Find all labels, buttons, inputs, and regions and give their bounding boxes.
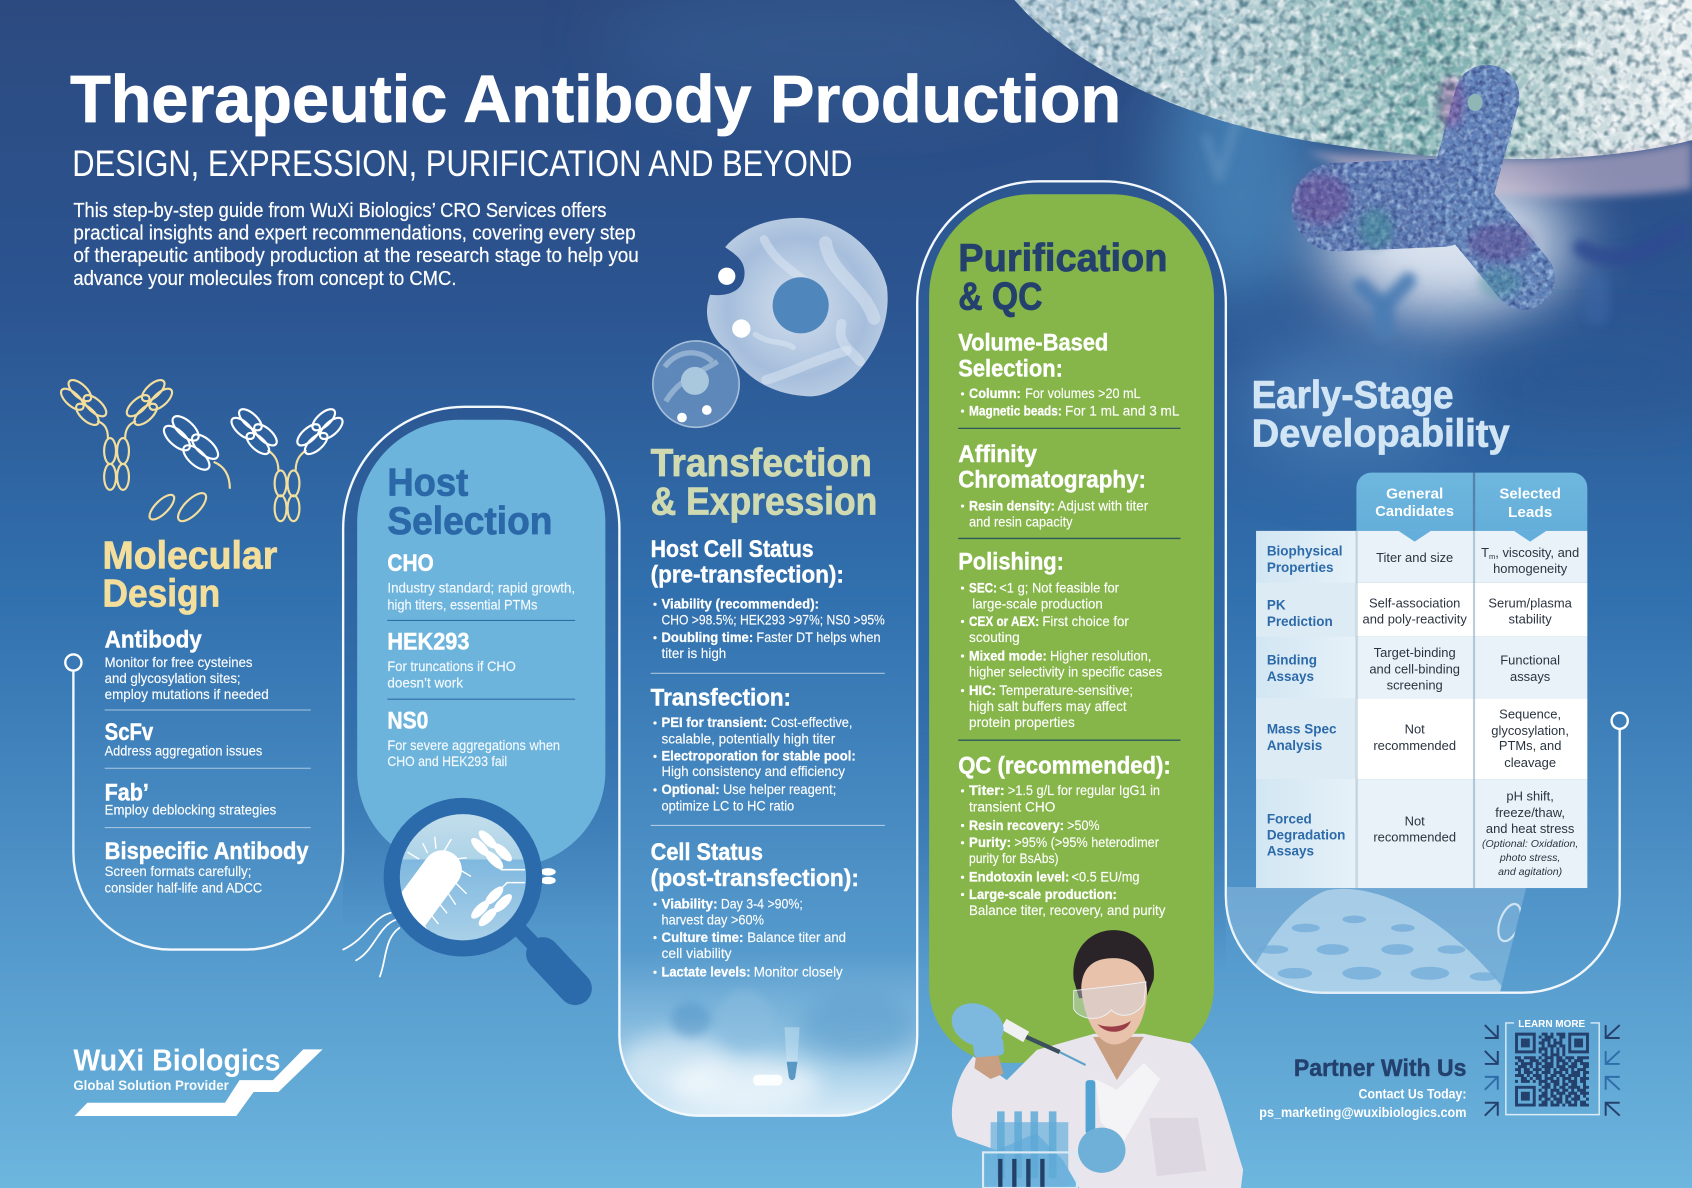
section: volume-based selection: For 1 mL and 3 mL xyxy=(1065,402,1180,418)
logo: WuXi Biologics xyxy=(73,1044,323,1116)
intro paragraph: of therapeutic antibody production at the research stage to help you xyxy=(73,244,639,267)
pipette xyxy=(1004,1024,1086,1065)
item: cho: high titers, essential PTMs xyxy=(387,597,537,613)
test tube xyxy=(1086,1080,1095,1134)
section: QC recommended: Resin recovery: xyxy=(969,817,1064,833)
photo: hand with tube in transfection panel xyxy=(620,989,917,1111)
heading: transfection and expression xyxy=(651,442,877,524)
section: affinity chromatography: Resin density: xyxy=(969,497,1055,513)
panel: host selection xyxy=(357,420,605,866)
table rows xyxy=(1256,473,1587,888)
section: polishing: <1 g; Not feasible for xyxy=(999,579,1119,595)
item: bispecific antibody xyxy=(105,839,309,895)
section: cell status: Viability: xyxy=(661,896,718,912)
smile xyxy=(1097,1021,1131,1032)
section: volume-based selection xyxy=(958,331,1180,418)
illustration: blurred background antibodies xyxy=(1206,124,1678,329)
section: QC recommended: Large-scale production: xyxy=(969,886,1117,902)
face xyxy=(1081,958,1147,1044)
column: selected leads: photo stress, xyxy=(1499,852,1560,864)
heading: early-stage developability xyxy=(1252,374,1510,456)
heading: early-stage developability: Early-Stage xyxy=(1252,374,1454,417)
upper glove xyxy=(945,995,1011,1058)
section: polishing xyxy=(958,550,1162,730)
item: hek293: HEK293 xyxy=(387,630,469,656)
section: QC recommended: >95% (>95% heterodimer xyxy=(1014,834,1159,850)
section: polishing: CEX or AEX: xyxy=(969,613,1039,629)
item: bispecific antibody: Bispecific Antibody xyxy=(105,839,309,865)
item: cho: Industry standard; rapid growth, xyxy=(387,579,575,595)
section: cell status: Balance titer and xyxy=(747,929,846,945)
item: bispecific antibody: consider half-life and ADCC xyxy=(105,879,262,895)
item: cho: CHO xyxy=(387,551,434,577)
QR code with learn more frame xyxy=(1506,1019,1599,1115)
column: selected leads: cleavage xyxy=(1504,755,1556,770)
subtitle: DESIGN, EXPRESSION, PURIFICATION AND BEYOND xyxy=(72,143,852,184)
column: general candidates: Not xyxy=(1405,722,1425,737)
forearm skin xyxy=(974,1052,1004,1079)
item: bispecific antibody: Screen formats carefully; xyxy=(105,863,251,879)
section: cell status: (post-transfection): xyxy=(651,866,859,892)
section: host cell status: CHO >98.5%; HEK293 >97%; NS0 >95% xyxy=(661,612,885,628)
section: polishing: Polishing: xyxy=(958,550,1064,576)
row labels: Assays xyxy=(1267,844,1314,859)
section: cell status xyxy=(651,840,859,980)
item: scfv: ScFv xyxy=(105,720,154,746)
row labels: Properties xyxy=(1267,560,1333,575)
item: fab: Fab’ xyxy=(105,781,149,807)
column: general candidates: screening xyxy=(1387,677,1443,692)
section: QC recommended: >1.5 g/L for regular IgG1 in xyxy=(1008,782,1160,798)
lower glove xyxy=(1078,1128,1125,1173)
flow outline connecting all sections xyxy=(65,181,1628,1116)
column: general candidates: Target-binding xyxy=(1374,645,1456,660)
table header: Leads xyxy=(1508,504,1552,521)
neck xyxy=(1093,1037,1144,1080)
section: QC recommended: transient CHO xyxy=(969,798,1055,814)
heading: host selection: Host xyxy=(387,461,468,504)
section: volume-based selection: Selection: xyxy=(958,357,1063,383)
item: antibody: Monitor for free cysteines xyxy=(105,654,253,670)
column: selected leads: freeze/thaw, xyxy=(1495,805,1565,820)
section: polishing: Mixed mode: xyxy=(969,647,1047,663)
row labels: Analysis xyxy=(1267,738,1322,753)
column: general candidates: Titer and size xyxy=(1376,550,1453,565)
coat collar xyxy=(1095,1063,1160,1144)
item: antibody: Antibody xyxy=(105,627,203,653)
heading: molecular design: Molecular xyxy=(103,535,277,578)
heading: purification and QC: Purification xyxy=(958,237,1168,280)
logo: WuXi Biologics: Global Solution Provider xyxy=(73,1077,229,1093)
icon: magnifier with bacterium and antibodies xyxy=(343,806,575,988)
item: ns0: NS0 xyxy=(387,708,428,734)
column: selected leads: stability xyxy=(1509,612,1552,627)
heading: transfection and expression: & Expression xyxy=(651,481,877,524)
column: selected leads: Serum/plasma xyxy=(1488,595,1573,610)
panel: purification and QC xyxy=(929,194,1214,1063)
column: selected leads: and agitation) xyxy=(1498,866,1562,878)
heading: transfection and expression: Transfection xyxy=(651,442,872,485)
column: selected leads: pH shift, xyxy=(1506,789,1554,804)
section: transfection: scalable, potentially high titer xyxy=(661,730,836,746)
section: cell status: Culture time: xyxy=(661,929,743,945)
section: host cell status: titer is high xyxy=(661,645,726,661)
column: selected leads xyxy=(1481,545,1579,878)
call to action: partner with us: Partner With Us xyxy=(1294,1056,1466,1082)
section: transfection: Optional: xyxy=(661,781,720,797)
item: hek293: doesn’t work xyxy=(387,674,464,690)
illustration: cells xyxy=(653,218,888,427)
item: ns0: For severe aggregations when xyxy=(387,737,560,753)
section: transfection: optimize LC to HC ratio xyxy=(661,797,794,813)
row labels: Binding xyxy=(1267,653,1317,668)
section: cell status: Cell Status xyxy=(651,840,763,866)
illustration: large antibody molecule xyxy=(1294,77,1532,298)
row labels: PK xyxy=(1267,598,1286,613)
column: selected leads: Sequence, xyxy=(1499,707,1561,722)
column: selected leads: PTMs, and xyxy=(1499,738,1561,753)
column: general candidates: and poly-reactivity xyxy=(1363,612,1467,627)
section: transfection xyxy=(651,686,856,813)
column: selected leads: glycosylation, xyxy=(1491,723,1569,738)
column: general candidates xyxy=(1363,550,1467,845)
section: transfection: Electroporation for stable pool: xyxy=(661,748,856,764)
section: polishing: higher selectivity in specific cases xyxy=(969,664,1162,680)
table header xyxy=(1356,473,1587,531)
panel: molecular design xyxy=(103,535,311,895)
section: affinity chromatography xyxy=(958,442,1148,530)
section: host cell status: (pre-transfection): xyxy=(651,563,844,589)
heading: purification and QC: & QC xyxy=(958,276,1042,319)
section: host cell status: Viability (recommended): xyxy=(661,596,819,612)
section: affinity chromatography: Affinity xyxy=(958,442,1038,468)
section: volume-based selection: Volume-Based xyxy=(958,331,1108,357)
item: scfv: Address aggregation issues xyxy=(105,742,262,758)
item: hek293: For truncations if CHO xyxy=(387,658,516,674)
panel: early-stage developability xyxy=(1226,374,1587,998)
section: affinity chromatography: Adjust with titer xyxy=(1058,497,1148,513)
QR code with learn more frame: LEARN MORE xyxy=(1518,1019,1585,1030)
section: QC recommended: QC (recommended): xyxy=(958,754,1171,780)
section: cell status: Monitor closely xyxy=(754,964,843,980)
section: polishing: high salt buffers may affect xyxy=(969,698,1127,714)
item: antibody: and glycosylation sites; xyxy=(105,670,241,686)
intro paragraph: This step-by-step guide from WuXi Biologics’ CRO Services offers xyxy=(73,199,606,222)
section: cell status: Day 3-4 >90%; xyxy=(721,896,803,912)
section: transfection: Cost-effective, xyxy=(771,714,852,730)
intro paragraph: advance your molecules from concept to CMC. xyxy=(73,267,456,290)
section: affinity chromatography: Chromatography: xyxy=(958,468,1146,494)
item: ns0: CHO and HEK293 fail xyxy=(387,753,507,769)
row labels: Biophysical xyxy=(1267,544,1342,559)
well plate photo xyxy=(1226,887,1527,998)
panel backgrounds xyxy=(343,181,1226,1116)
section: polishing: HIC: xyxy=(969,682,996,698)
column: general candidates: recommended xyxy=(1373,738,1456,753)
section: volume-based selection: For volumes >20 mL xyxy=(1025,385,1141,401)
section: polishing: protein properties xyxy=(969,714,1075,730)
table: developability assays xyxy=(1256,473,1587,888)
panel: transfection and expression xyxy=(651,442,885,980)
column: general candidates: recommended xyxy=(1373,830,1456,845)
column: general candidates: Self-association xyxy=(1369,595,1460,610)
lab coat xyxy=(952,1034,1243,1188)
coat sleeve fold and pocket xyxy=(1149,1118,1206,1176)
section: cell status: Lactate levels: xyxy=(661,964,751,980)
item: ns0 xyxy=(387,708,560,769)
section: affinity chromatography: and resin capacity xyxy=(969,514,1073,530)
section: polishing: First choice for xyxy=(1042,613,1129,629)
row labels: Prediction xyxy=(1267,614,1333,629)
call to action: partner with us: ps_marketing@wuxibiologics.com xyxy=(1259,1104,1466,1120)
column: selected leads: homogeneity xyxy=(1493,561,1568,576)
item: fab xyxy=(105,781,276,818)
row labels: Mass Spec xyxy=(1267,722,1337,737)
section: QC recommended: Titer: xyxy=(969,782,1005,798)
column: selected leads: (Optional: Oxidation, xyxy=(1482,838,1578,850)
section: polishing: Temperature-sensitive; xyxy=(999,682,1133,698)
heading: host selection: Selection xyxy=(387,500,552,543)
section: host cell status: Faster DT helps when xyxy=(756,629,881,645)
heading: host selection xyxy=(387,461,552,543)
column: selected leads: and heat stress xyxy=(1486,821,1574,836)
section: host cell status: Host Cell Status xyxy=(651,537,814,563)
item: antibody: employ mutations if needed xyxy=(105,686,269,702)
heading: molecular design xyxy=(103,535,277,615)
heading: molecular design: Design xyxy=(103,572,220,615)
section: polishing: large-scale production xyxy=(972,596,1103,612)
section: transfection: PEI for transient: xyxy=(661,714,767,730)
illustration: cell sphere surface xyxy=(1014,0,1692,197)
row labels: Forced xyxy=(1267,811,1312,826)
section: cell status: harvest day >60% xyxy=(661,912,764,928)
table header: General xyxy=(1386,486,1443,503)
column: general candidates: Not xyxy=(1405,813,1425,828)
section: QC recommended: purity for BsAbs) xyxy=(969,850,1059,866)
section: polishing: Higher resolution, xyxy=(1050,647,1151,663)
section: polishing: SEC: xyxy=(969,579,997,595)
title: Therapeutic Antibody Production xyxy=(70,62,1121,137)
section: transfection: High consistency and efficiency xyxy=(661,763,845,779)
row labels xyxy=(1267,544,1345,859)
column: selected leads: assays xyxy=(1510,669,1550,684)
column: selected leads: T xyxy=(1481,545,1489,560)
item: hek293 xyxy=(387,630,516,690)
logo: WuXi Biologics: WuXi Biologics xyxy=(73,1044,281,1077)
intro paragraph xyxy=(73,199,639,290)
item: cho xyxy=(387,551,575,613)
icon: antibody outlines xyxy=(58,376,346,525)
section: volume-based selection: Magnetic beads: xyxy=(969,402,1062,418)
intro paragraph: practical insights and expert recommendations, covering every step xyxy=(73,222,636,245)
hair xyxy=(1073,930,1154,998)
section: QC recommended: Balance titer, recovery, and purity xyxy=(969,902,1165,918)
test tube rack xyxy=(983,1111,1077,1188)
section: QC recommended: <0.5 EU/mg xyxy=(1072,869,1140,885)
call to action: partner with us xyxy=(1259,1056,1466,1120)
column: selected leads: , viscosity, and xyxy=(1495,545,1579,560)
section: polishing: scouting xyxy=(969,629,1020,645)
section: host cell status xyxy=(651,537,885,661)
item: fab: Employ deblocking strategies xyxy=(105,802,276,818)
call to action: partner with us: Contact Us Today: xyxy=(1359,1085,1466,1101)
row labels: Degradation xyxy=(1267,827,1345,842)
icon: arrows pointing to QR code xyxy=(1485,1025,1620,1116)
section: transfection: Use helper reagent; xyxy=(723,781,836,797)
column: selected leads: Functional xyxy=(1500,653,1560,668)
item: scfv xyxy=(105,720,262,758)
item: antibody xyxy=(105,627,269,702)
section: QC recommended xyxy=(958,754,1171,918)
section: transfection: Transfection: xyxy=(651,686,791,712)
table header: Selected xyxy=(1499,486,1561,503)
row labels: Assays xyxy=(1267,669,1314,684)
column: selected leads: m xyxy=(1489,552,1495,561)
section: cell status: cell viability xyxy=(661,945,732,961)
section: volume-based selection: Column: xyxy=(969,385,1021,401)
heading: early-stage developability: Developability xyxy=(1252,413,1510,456)
safety goggles xyxy=(1074,982,1146,1018)
heading: purification and QC xyxy=(958,237,1168,319)
section: QC recommended: Endotoxin level: xyxy=(969,869,1069,885)
section: QC recommended: >50% xyxy=(1067,817,1100,833)
column: general candidates: and cell-binding xyxy=(1369,661,1460,676)
section: QC recommended: Purity: xyxy=(969,834,1011,850)
section: host cell status: Doubling time: xyxy=(661,629,753,645)
table header: Candidates xyxy=(1375,503,1454,520)
photo: scientist with pipette xyxy=(945,930,1243,1188)
